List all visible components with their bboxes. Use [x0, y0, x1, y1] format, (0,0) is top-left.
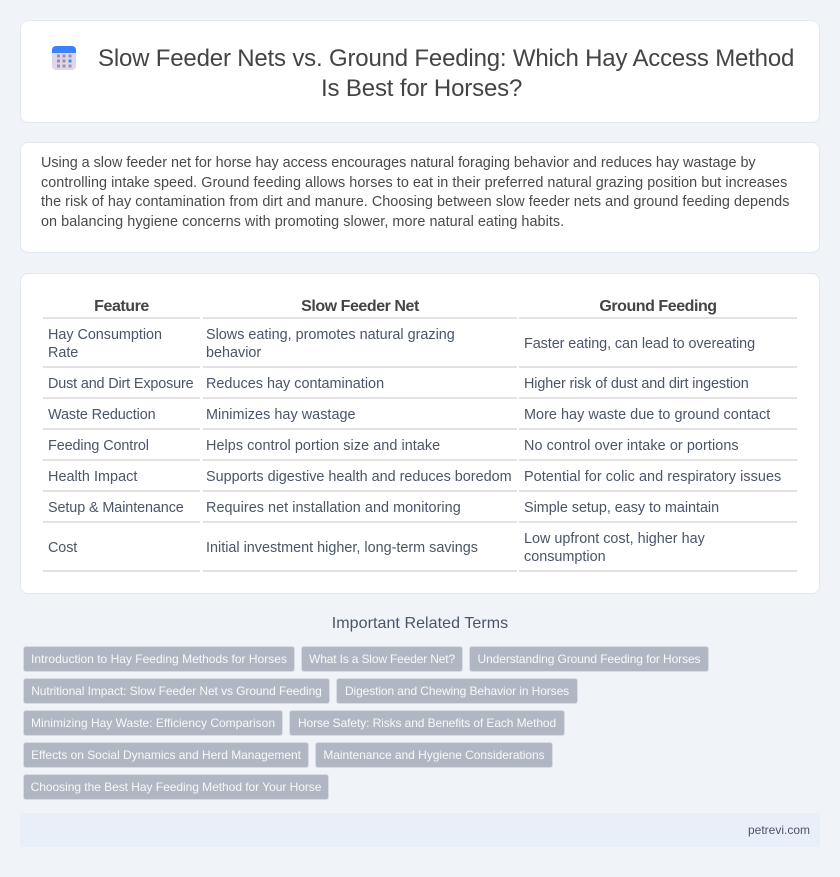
intro text: the risk of hay contamination from dirt and manure. Choosing between slow feeder nets and ground feeding depends [41, 194, 789, 210]
comparison table: Cost [48, 540, 77, 556]
related terms chips: Effects on Social Dynamics and Herd Management [31, 748, 301, 762]
intro text: controlling intake speed. Ground feeding allows horses to eat in their preferred natural grazing position but increases [41, 175, 787, 191]
related terms chips: Digestion and Chewing Behavior in Horses [345, 684, 569, 698]
footer bar [20, 813, 820, 847]
column header: ground feeding: Ground Feeding [599, 298, 717, 315]
intro text: Using a slow feeder net for horse hay access encourages natural foraging behavior and reduces hay wastage by [41, 155, 756, 171]
comparison table: consumption [524, 549, 606, 565]
column header: feature: Feature [94, 298, 149, 315]
comparison table: Helps control portion size and intake [206, 438, 440, 454]
title panel [20, 20, 820, 123]
table panel [20, 273, 820, 594]
icon: calendar [52, 46, 76, 70]
related terms heading: Important Related Terms [332, 615, 508, 632]
comparison table: Initial investment higher, long-term savings [206, 540, 478, 556]
comparison table: Supports digestive health and reduces boredom [206, 469, 512, 485]
comparison table: Simple setup, easy to maintain [524, 500, 719, 516]
title: Is Best for Horses? [321, 75, 522, 102]
comparison table: Health Impact [48, 469, 137, 485]
related terms chips: Minimizing Hay Waste: Efficiency Comparison [31, 716, 275, 730]
intro text [41, 155, 789, 230]
comparison table: More hay waste due to ground contact [524, 407, 770, 423]
comparison table: Slows eating, promotes natural grazing [206, 327, 455, 343]
related terms chips: Choosing the Best Hay Feeding Method for Your Horse [31, 780, 321, 794]
comparison table [43, 298, 797, 572]
comparison table: Potential for colic and respiratory issues [524, 469, 781, 485]
related terms chips: Introduction to Hay Feeding Methods for Horses [31, 652, 287, 666]
comparison table: Reduces hay contamination [206, 376, 384, 392]
comparison table: Hay Consumption [48, 327, 162, 343]
comparison table: Requires net installation and monitoring [206, 500, 461, 516]
comparison table: Higher risk of dust and dirt ingestion [524, 376, 749, 392]
comparison table: Rate [48, 345, 78, 361]
related terms chips: What Is a Slow Feeder Net? [309, 652, 455, 666]
footer source text: petrevi.com [748, 823, 810, 837]
intro panel [20, 142, 820, 253]
comparison table: No control over intake or portions [524, 438, 739, 454]
related terms chips [23, 646, 709, 800]
title: Slow Feeder Nets vs. Ground Feeding: Which Hay Access Method [98, 45, 794, 72]
intro text: on balancing hygiene concerns with promoting slower, more natural eating habits. [41, 214, 564, 230]
comparison table: Low upfront cost, higher hay [524, 531, 705, 547]
comparison table: Minimizes hay wastage [206, 407, 356, 423]
comparison table: Dust and Dirt Exposure [48, 376, 193, 392]
related terms chips: Horse Safety: Risks and Benefits of Each Method [298, 716, 556, 730]
column header: slow feeder net: Slow Feeder Net [301, 298, 419, 315]
comparison table: behavior [206, 345, 261, 361]
comparison table: Setup & Maintenance [48, 500, 184, 516]
title [98, 45, 794, 102]
comparison table: Feeding Control [48, 438, 149, 454]
related terms chips: Nutritional Impact: Slow Feeder Net vs Ground Feeding [31, 684, 322, 698]
comparison table: Faster eating, can lead to overeating [524, 336, 755, 352]
related terms chips: Understanding Ground Feeding for Horses [478, 652, 700, 666]
related terms chips: Maintenance and Hygiene Considerations [323, 748, 545, 762]
comparison table: Waste Reduction [48, 407, 156, 423]
